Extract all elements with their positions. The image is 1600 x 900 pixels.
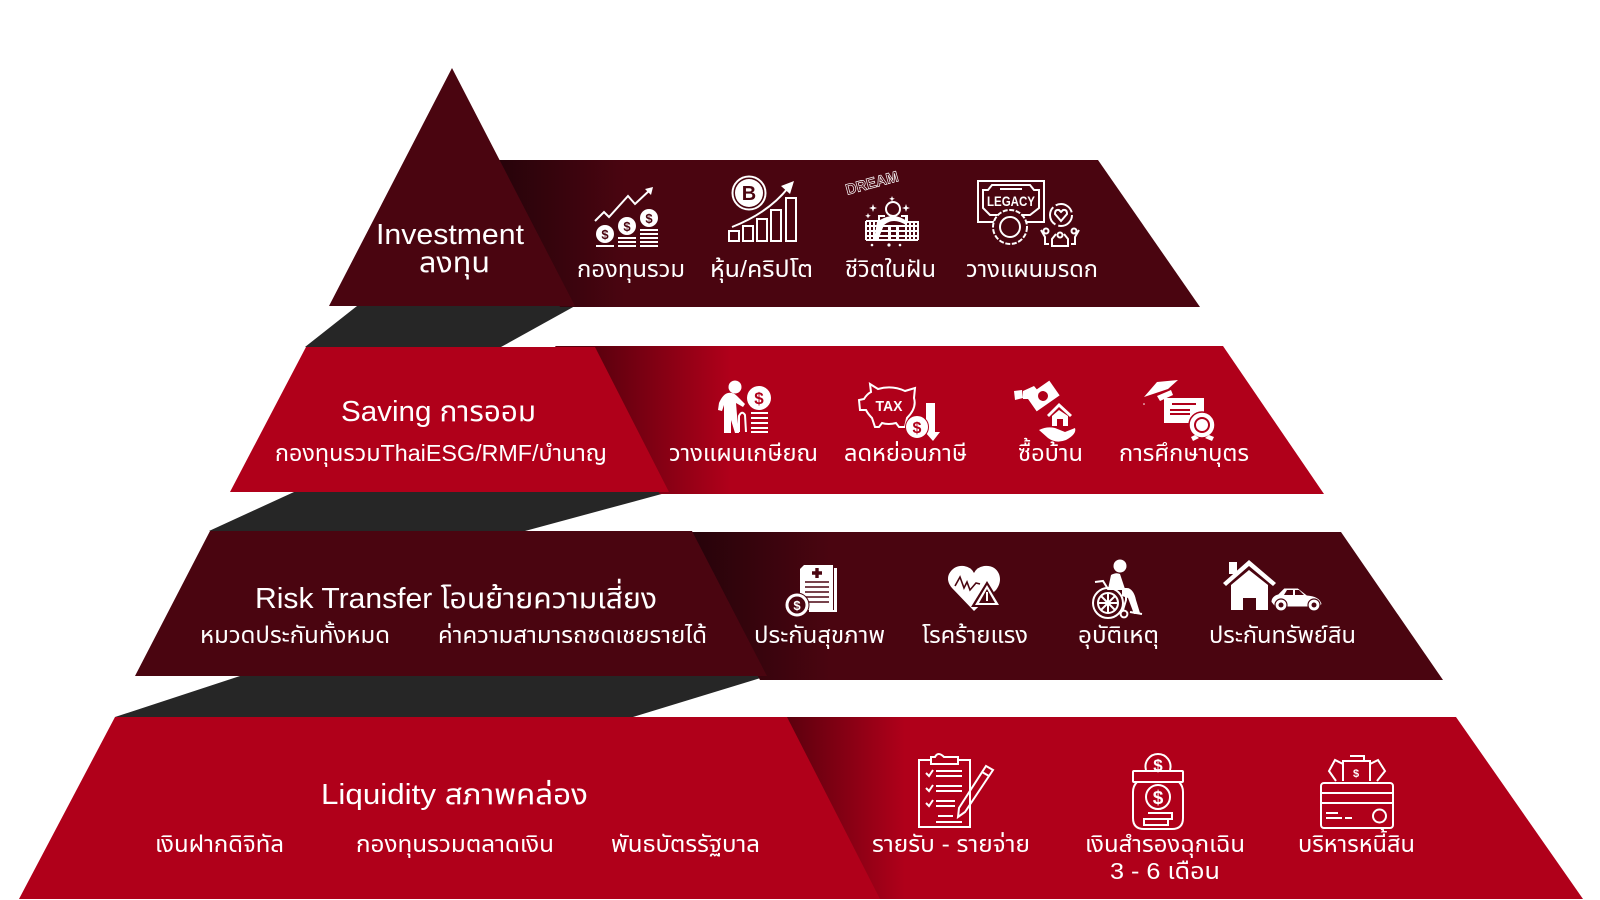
label: accident: อุบัติเหตุ bbox=[1078, 622, 1159, 649]
label: emergency savings bbox=[1085, 831, 1245, 884]
icon: tax piggy bank bbox=[859, 384, 940, 441]
label: buying a house: ซื้อบ้าน bbox=[1018, 437, 1083, 466]
label: dream life: ชีวิตในฝัน bbox=[845, 256, 936, 282]
icon: coins with rising chart: $ bbox=[601, 227, 609, 242]
panel: saving trapezoid bbox=[230, 347, 669, 492]
heading: investment bbox=[376, 219, 524, 279]
panel: liquidity trapezoid bbox=[19, 717, 880, 899]
label: mutual funds: กองทุนรวม bbox=[577, 256, 685, 283]
label: critical illness: โรคร้ายแรง bbox=[922, 622, 1028, 648]
text: saving products: กองทุนรวมThaiESG/RMF/บำนาญ bbox=[275, 440, 607, 467]
panel: investment triangle bbox=[329, 68, 575, 306]
connector: third tier shadow bbox=[115, 676, 767, 717]
label: tax deduction: ลดหย่อนภาษี bbox=[844, 440, 967, 466]
icon: bitcoin growth: B bbox=[742, 183, 756, 205]
panel: investment band bbox=[490, 160, 1200, 307]
icon: emergency savings jar: $ bbox=[1153, 756, 1163, 775]
connector: top tier shadow bbox=[305, 306, 575, 347]
text: government bonds: พันธบัตรรัฐบาล bbox=[611, 831, 760, 857]
icon: legacy certificate and family bbox=[978, 181, 1079, 246]
icon: tax piggy bank: TAX bbox=[876, 398, 902, 415]
icon: buying a home bbox=[1014, 381, 1075, 442]
label: debt management: บริหารหนี้สิน bbox=[1298, 828, 1415, 857]
icon: house and car bbox=[1223, 560, 1322, 611]
icon: legacy certificate and family: LEGACY bbox=[987, 194, 1035, 209]
text: digital deposit: เงินฝากดิจิทัล bbox=[155, 831, 284, 857]
icon: coins with rising chart bbox=[595, 187, 658, 246]
label: retirement planning: วางแผนเกษียณ bbox=[669, 440, 818, 466]
icon: emergency savings jar: $ bbox=[1153, 788, 1164, 809]
label: stocks and crypto: หุ้น/คริปโต bbox=[710, 256, 813, 283]
label: legacy planning: วางแผนมรดก bbox=[966, 256, 1098, 282]
label: property insurance: ประกันทรัพย์สิน bbox=[1209, 622, 1356, 648]
icon: dream stamp and person: DREAM bbox=[844, 168, 900, 199]
label: emergency savings: เงินสำรองฉุกเฉิน bbox=[1085, 831, 1245, 858]
icon: emergency savings jar bbox=[1133, 754, 1183, 829]
panel: risk transfer trapezoid bbox=[135, 531, 767, 676]
icon: retirement: $ bbox=[754, 389, 764, 408]
icon: accident wheelchair bbox=[1093, 560, 1142, 618]
connector: second tier shadow bbox=[209, 492, 669, 531]
icon: bitcoin growth bbox=[729, 176, 796, 241]
icon: critical illness heart bbox=[948, 566, 1003, 611]
icon: retirement bbox=[718, 380, 771, 433]
heading: liquidity: Liquidity สภาพคล่อง bbox=[321, 779, 588, 811]
text: all insurance categories: หมวดประกันทั้งหมด bbox=[200, 620, 390, 648]
icon: health insurance: $ bbox=[793, 598, 801, 613]
panel: liquidity band bbox=[780, 717, 1583, 899]
heading: risk transfer: Risk Transfer โอนย้ายความเสี่ยง bbox=[255, 578, 657, 615]
icon: child education bbox=[1143, 380, 1215, 441]
icon: tax piggy bank: $ bbox=[913, 420, 922, 437]
heading: investment: ลงทุน bbox=[419, 247, 490, 279]
heading: investment: Investment bbox=[376, 219, 524, 251]
heading: saving: Saving การออม bbox=[341, 396, 536, 428]
icon: debt management card bbox=[1321, 756, 1393, 828]
text: money market fund: กองทุนรวมตลาดเงิน bbox=[356, 831, 554, 858]
icon: debt management card: $ bbox=[1353, 768, 1359, 780]
icon: coins with rising chart: $ bbox=[645, 211, 653, 226]
icon: coins with rising chart: $ bbox=[623, 219, 631, 234]
panel: risk transfer band bbox=[680, 532, 1443, 680]
label: emergency savings: 3 - 6 เดือน bbox=[1110, 858, 1220, 884]
icon: health insurance bbox=[785, 565, 837, 617]
icon: income and expense clipboard bbox=[919, 754, 993, 827]
label: health insurance: ประกันสุขภาพ bbox=[754, 622, 885, 649]
label: income and expense: รายรับ - รายจ่าย bbox=[872, 831, 1030, 857]
label: child education: การศึกษาบุตร bbox=[1119, 440, 1249, 467]
panel: saving band bbox=[555, 346, 1324, 494]
icon: dream stamp and person bbox=[844, 168, 918, 247]
text: income replacement value: ค่าความสามารถชดเชยรายได้ bbox=[438, 622, 707, 648]
